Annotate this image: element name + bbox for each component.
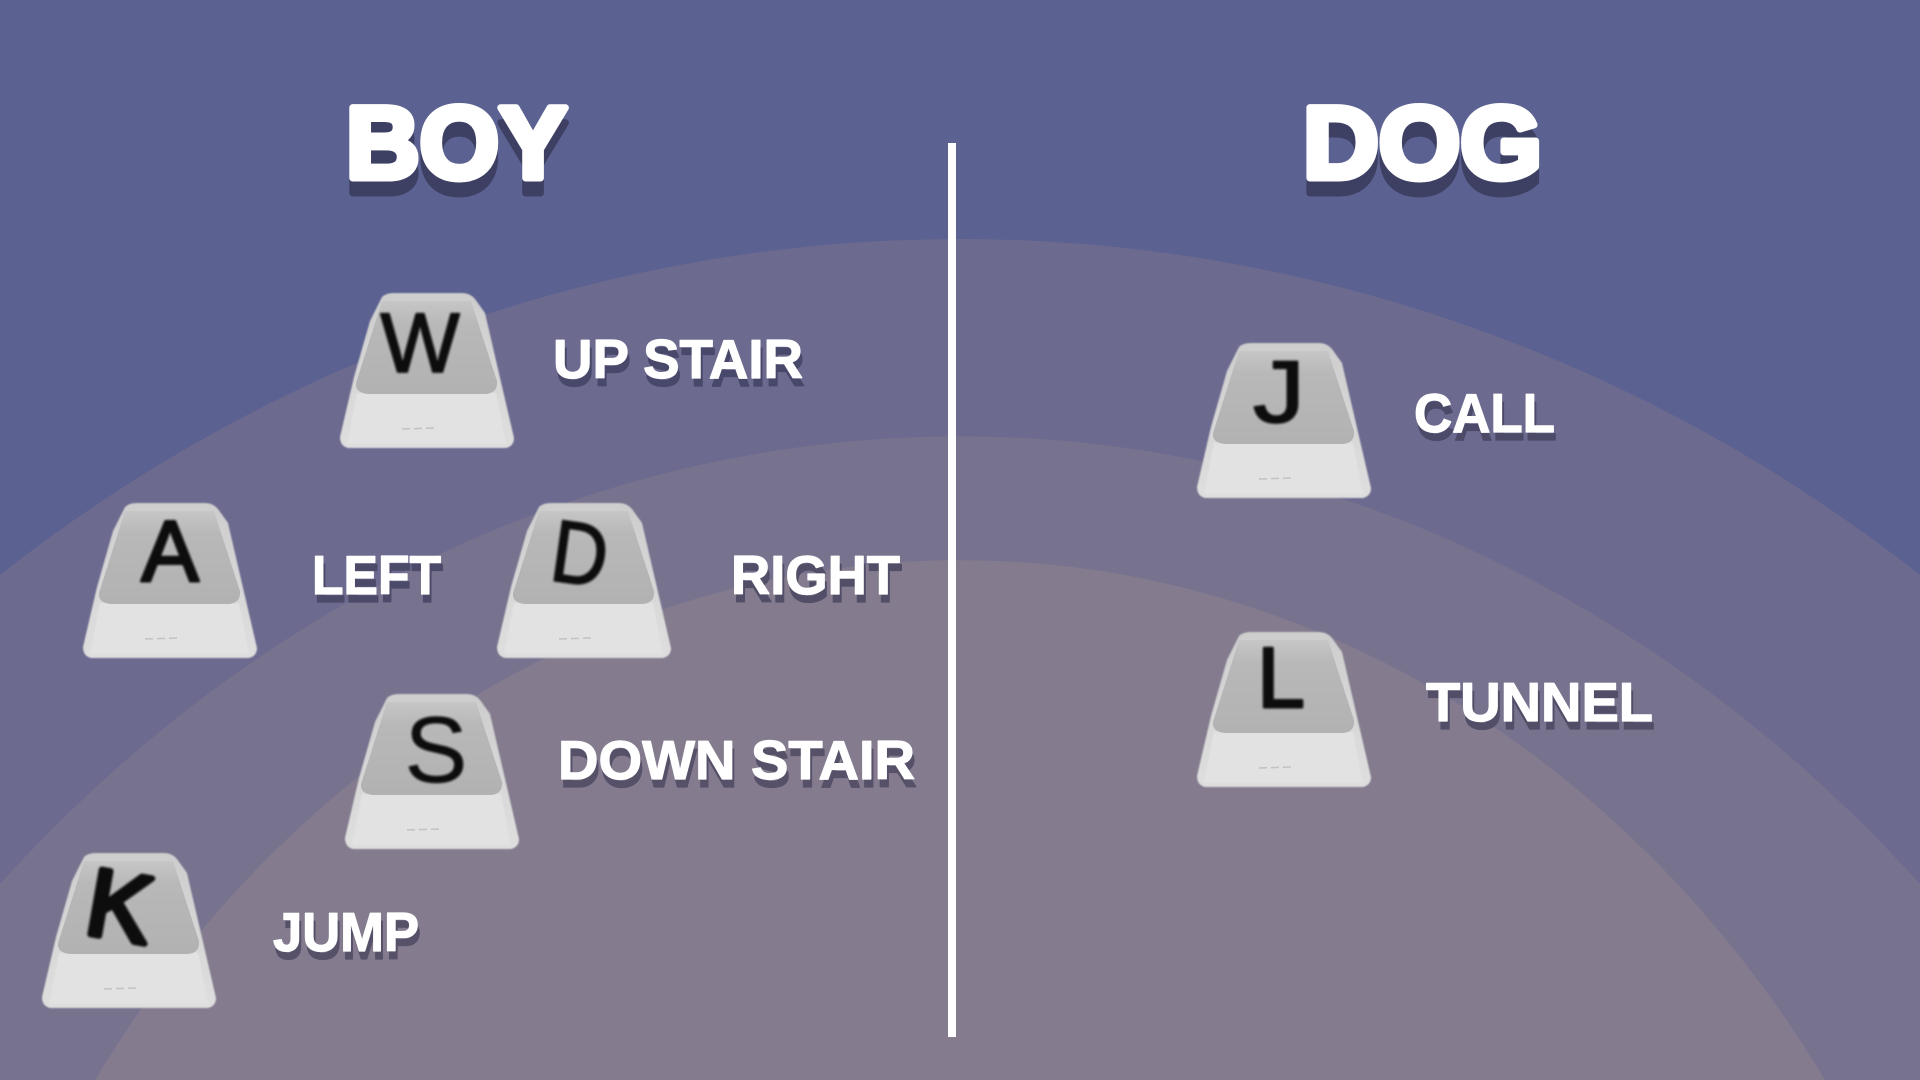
divider: [948, 143, 956, 1037]
label: RIGHT: RIGHT: [733, 552, 902, 614]
key: W: W: [380, 296, 460, 390]
label: RIGHT: RIGHT: [731, 544, 900, 606]
key: A: [83, 503, 257, 658]
label: LEFT: LEFT: [312, 544, 441, 606]
key: L: [1197, 631, 1371, 787]
heading: BOY: BOY: [346, 86, 567, 200]
heading: BOY: BOY: [346, 101, 567, 215]
label: DOWN STAIR: DOWN STAIR: [558, 729, 915, 791]
label: CALL: CALL: [1416, 390, 1557, 452]
key: K: [42, 848, 216, 1008]
heading: DOG: DOG: [1303, 86, 1542, 200]
key: J: [1197, 342, 1371, 498]
heading: DOG: DOG: [1303, 101, 1542, 215]
key: A: A: [141, 504, 199, 600]
key: L: L: [1257, 631, 1305, 726]
key: K: K: [79, 848, 161, 965]
label: UP STAIR: UP STAIR: [553, 328, 803, 390]
label: CALL: CALL: [1414, 382, 1555, 444]
key: D: [497, 501, 671, 658]
label: TUNNEL: TUNNEL: [1426, 671, 1653, 733]
label: UP STAIR: UP STAIR: [555, 336, 805, 398]
key: S: [345, 694, 519, 849]
label: DOWN STAIR: DOWN STAIR: [560, 737, 917, 799]
key: J: J: [1253, 342, 1305, 441]
label: JUMP: JUMP: [273, 901, 419, 963]
label: LEFT: LEFT: [314, 552, 443, 614]
key: D: D: [545, 501, 615, 606]
key: W: [340, 293, 514, 448]
label: JUMP: JUMP: [275, 909, 421, 971]
label: TUNNEL: TUNNEL: [1428, 679, 1655, 741]
key: S: S: [405, 697, 467, 802]
